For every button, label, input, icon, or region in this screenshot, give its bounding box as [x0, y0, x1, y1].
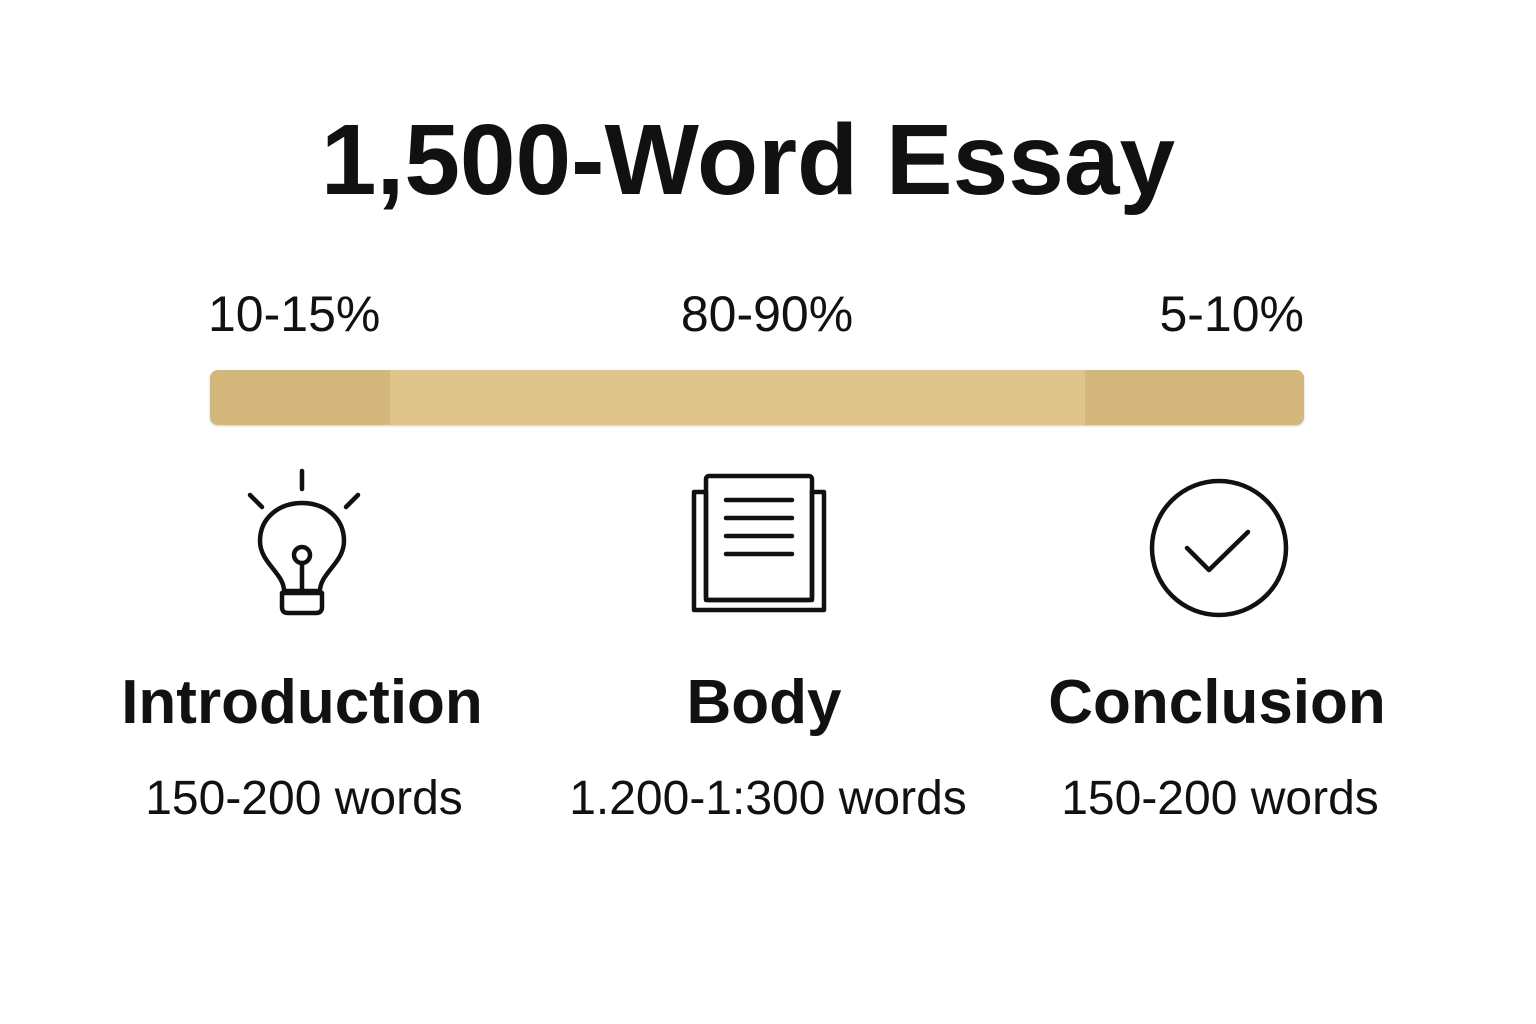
percent label: intro: 10-15% [208, 286, 380, 342]
word count: body: 1.200-1:300 words [569, 772, 967, 825]
heading: body: Body [686, 668, 842, 737]
bar segment: conclusion [1085, 370, 1304, 425]
word count: introduction: 150-200 words [145, 772, 463, 825]
icon: check circle [1150, 478, 1288, 618]
heading: conclusion: Conclusion [1048, 668, 1386, 737]
proportion bar [210, 370, 1304, 425]
title: 1,500-Word Essay [321, 104, 1175, 216]
percent label: conclusion: 5-10% [1159, 286, 1304, 342]
icon: document [692, 474, 826, 612]
icon: lightbulb [248, 468, 360, 616]
bar segment: intro [210, 370, 390, 425]
heading: introduction: Introduction [121, 668, 483, 737]
percent label: body: 80-90% [681, 286, 853, 342]
word count: conclusion: 150-200 words [1061, 772, 1379, 825]
